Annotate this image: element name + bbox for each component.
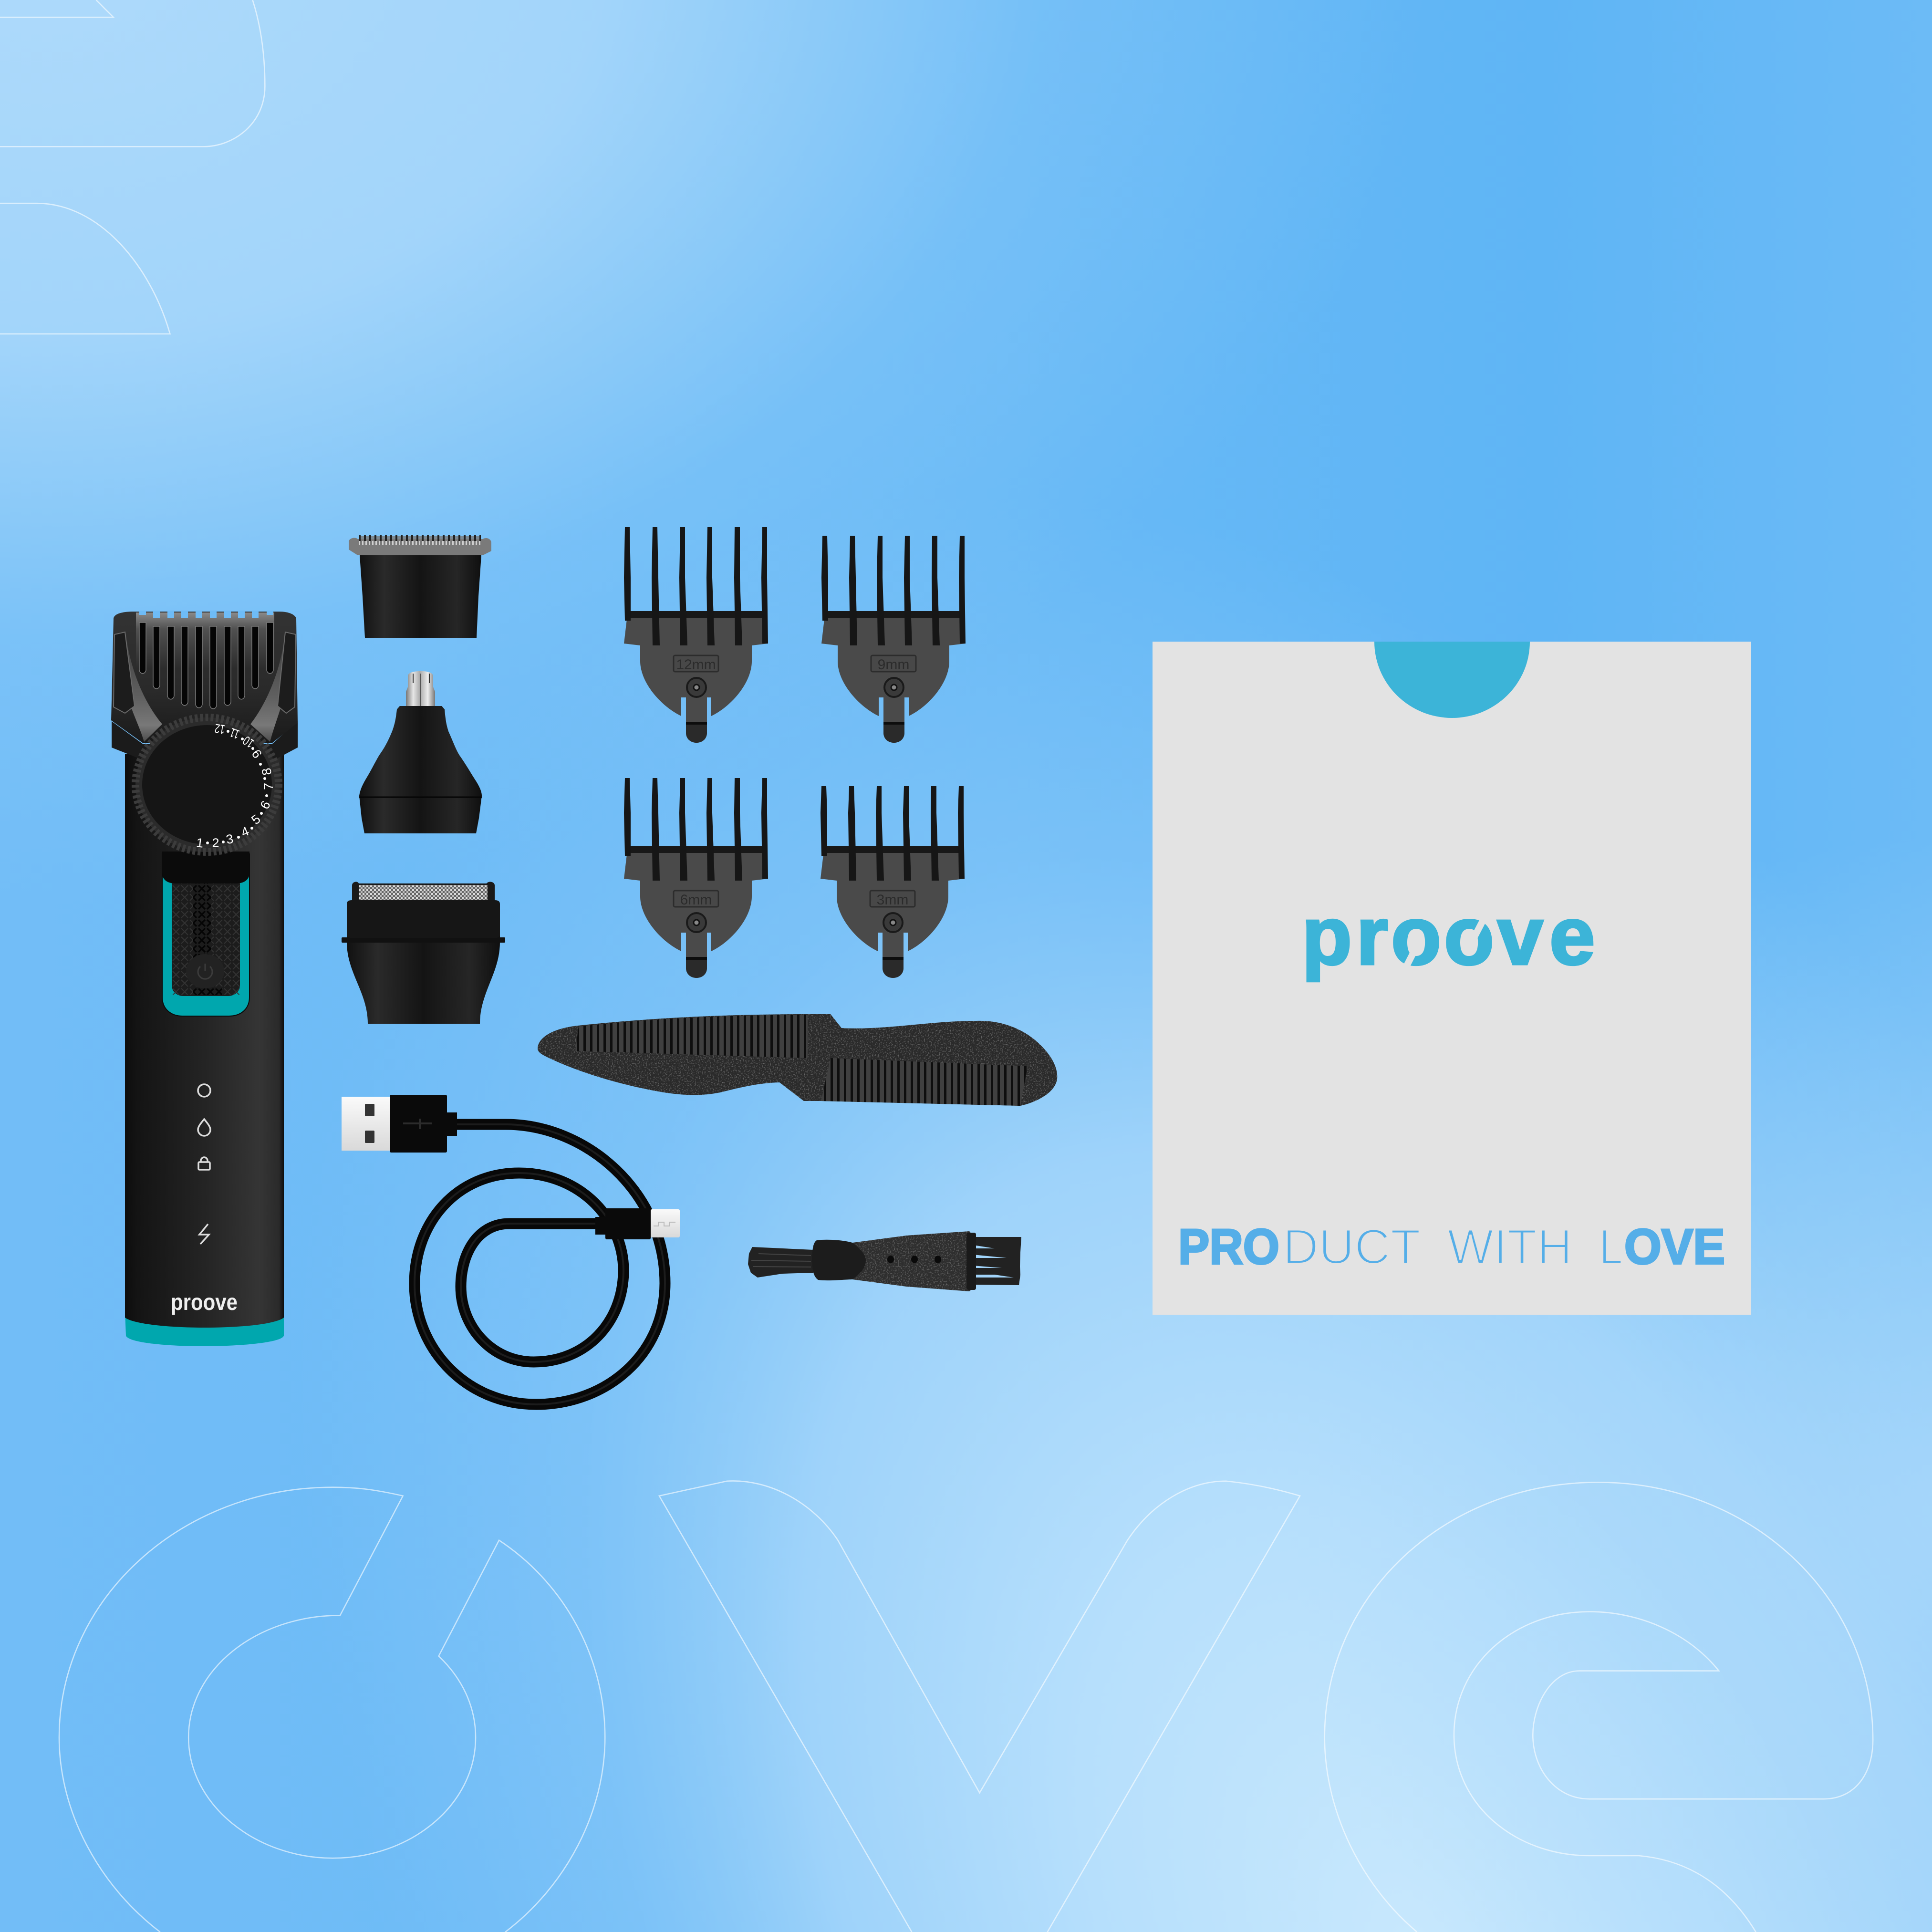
card slogan: WITH xyxy=(1447,1219,1572,1275)
guard 9mm: 9mm xyxy=(878,657,909,673)
guard 6mm xyxy=(624,778,768,978)
foil xyxy=(352,882,495,900)
dial numbers: 2 xyxy=(212,836,219,850)
tooth gaps xyxy=(139,623,273,709)
icon: circle indicator xyxy=(198,1084,210,1097)
guard 3mm: 3mm xyxy=(877,892,908,908)
blade xyxy=(349,538,491,555)
cleaning brush xyxy=(748,1231,1021,1291)
dial numbers: 5 xyxy=(249,811,263,827)
guard 9mm xyxy=(821,536,966,743)
lower collar xyxy=(112,721,298,759)
textured panel xyxy=(172,873,240,996)
card slogan: L xyxy=(1599,1219,1623,1275)
background outline letters top-left xyxy=(0,0,265,334)
tooth highlights xyxy=(136,613,274,668)
dial separators xyxy=(206,730,268,844)
dial numbers: 9 xyxy=(249,747,265,761)
USB cable xyxy=(342,1095,680,1404)
guard 3mm xyxy=(821,786,965,978)
comb xyxy=(538,1014,1057,1106)
brush holes xyxy=(887,1256,941,1263)
guard 12mm xyxy=(624,527,768,743)
dial numbers: 4 xyxy=(239,824,251,840)
dial numbers: 7 xyxy=(261,783,276,790)
guard 6mm: 6mm xyxy=(680,892,712,908)
trimmer teal base xyxy=(125,1312,284,1346)
comb upper teeth xyxy=(575,1015,808,1058)
nose trimmer attachment xyxy=(359,671,482,833)
head diagonal highlights xyxy=(125,632,286,742)
icon: lock indicator xyxy=(198,1157,210,1170)
dial numbers: 8 xyxy=(259,767,274,777)
comb lower teeth xyxy=(821,1058,1028,1106)
dial numbers: 11 xyxy=(228,725,241,742)
card slogan: OVE xyxy=(1624,1219,1725,1275)
slider cap xyxy=(162,852,249,883)
trimmer body xyxy=(125,754,284,1328)
shaver attachment xyxy=(342,882,505,1024)
background outline letters ove xyxy=(59,1481,1873,1932)
icon: drop indicator xyxy=(198,1119,210,1136)
card notch xyxy=(1374,642,1530,718)
dial xyxy=(135,717,279,852)
dial numbers: 3 xyxy=(225,831,234,847)
card slogan: PRO xyxy=(1178,1219,1279,1275)
card slogan xyxy=(1178,1219,1725,1275)
head side pockets xyxy=(114,632,296,713)
dial numbers xyxy=(196,721,276,851)
brush handle xyxy=(812,1231,976,1291)
dial numbers: 12 xyxy=(214,721,226,737)
card logo: proove xyxy=(1302,890,1595,982)
slider window xyxy=(162,852,249,1016)
dial numbers: 1 xyxy=(196,835,204,851)
icon: lightning indicator xyxy=(199,1224,209,1244)
tooth top notches xyxy=(139,611,273,618)
trimmer xyxy=(111,611,298,1346)
panel: proove card xyxy=(1153,642,1751,1315)
metal tip xyxy=(406,671,435,706)
guard 12mm: 12mm xyxy=(676,657,716,673)
cable xyxy=(415,1124,665,1404)
micro USB plug xyxy=(595,1208,680,1239)
trimmer blade attachment xyxy=(349,536,491,638)
trimmer logo: proove xyxy=(171,1290,238,1315)
trimmer head xyxy=(111,611,298,759)
dial numbers: 6 xyxy=(257,798,273,812)
card slogan: DUCT xyxy=(1283,1219,1421,1275)
USB-A plug xyxy=(342,1095,457,1153)
brush bristles xyxy=(748,1237,1021,1285)
power button xyxy=(186,954,224,988)
dial numbers: 10 xyxy=(240,733,257,751)
